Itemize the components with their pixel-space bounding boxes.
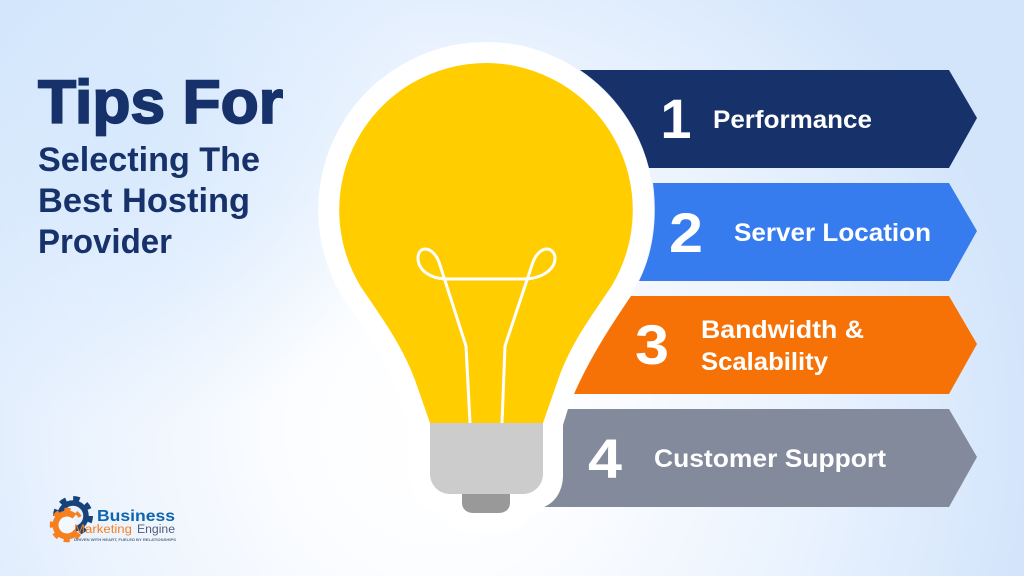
bulb tip xyxy=(462,494,510,513)
title xyxy=(38,68,283,261)
logo: Business Marketing Engine xyxy=(45,498,176,547)
title: Selecting The xyxy=(38,141,260,179)
panel: tip 3 bandwidth and scalability: 3 xyxy=(635,313,669,376)
icon: blue gear xyxy=(56,498,90,534)
bulb white halo xyxy=(339,63,633,513)
logo: Business Marketing Engine: Engine xyxy=(137,524,175,536)
title: Best Hosting xyxy=(38,182,250,220)
panel: tip 3 bandwidth and scalability xyxy=(574,296,977,394)
panel: tip 3 bandwidth and scalability: Bandwidth & xyxy=(701,316,864,344)
panel: tip 1 performance xyxy=(580,70,977,168)
logo tagline: DRIVEN WITH HEART, FUELED BY RELATIONSHIPS xyxy=(74,538,176,542)
icon: orange gear xyxy=(45,503,89,547)
title: Tips For xyxy=(38,68,283,136)
panel: tip 4 customer support: Customer Support xyxy=(654,445,887,473)
logo wordmark: Business xyxy=(97,508,175,525)
panel: tip 2 server location: 2 xyxy=(669,201,703,264)
icon: light bulb xyxy=(339,63,633,513)
bulb glass xyxy=(339,63,633,423)
panel: tip 2 server location: Server Location xyxy=(734,219,931,247)
panel: tip 1 performance: Performance xyxy=(713,106,872,134)
panel: tip 4 customer support xyxy=(544,409,977,507)
panel: tip 3 bandwidth and scalability: Scalability xyxy=(701,348,828,376)
bulb filament xyxy=(418,249,555,423)
panel: tip 2 server location xyxy=(639,183,977,281)
panel: tip 1 performance: 1 xyxy=(660,87,692,150)
bulb screw base xyxy=(430,423,543,494)
title: Provider xyxy=(38,223,172,261)
panel: tip 4 customer support: 4 xyxy=(588,427,622,490)
logo: Business Marketing Engine: Marketing xyxy=(74,524,132,536)
